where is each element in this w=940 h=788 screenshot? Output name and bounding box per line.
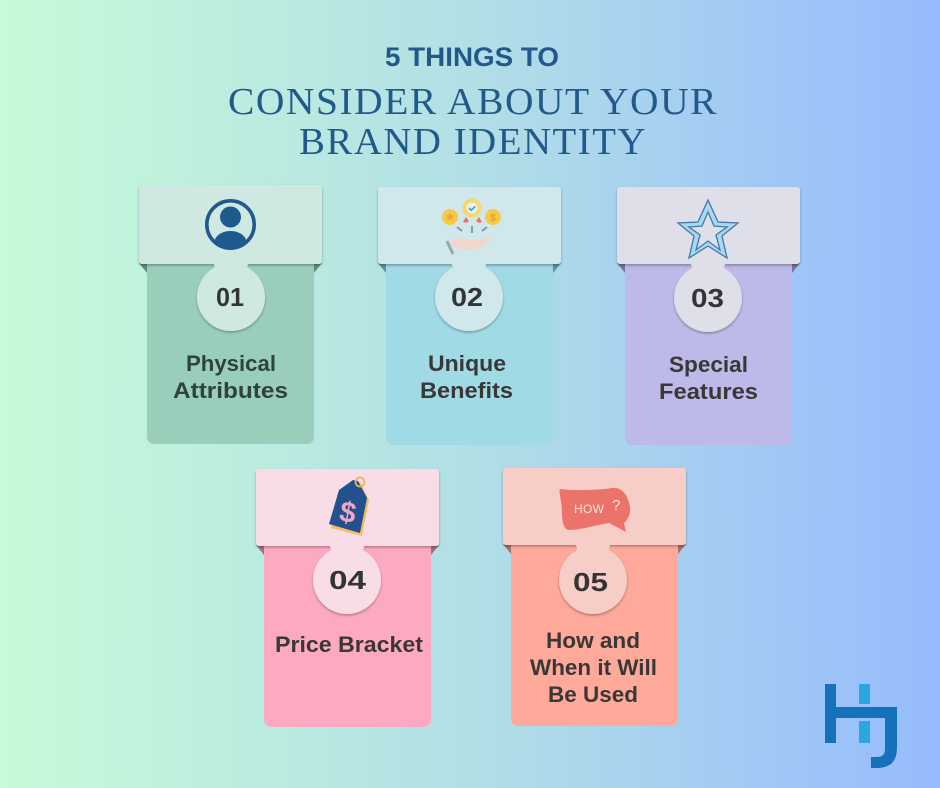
number 04: 04: [329, 565, 367, 595]
number 01: 01: [216, 282, 244, 312]
icon: hand with rewards: [442, 198, 501, 254]
panel: card 5 how and when: [503, 468, 686, 726]
icon: how speech bubble: HOW: [574, 502, 605, 516]
title: 5 THINGS TO: [385, 42, 559, 72]
label: [173, 351, 288, 403]
number 02: 02: [451, 282, 483, 312]
number 03: 03: [691, 283, 724, 313]
logo: [825, 684, 897, 768]
label: Unique: [428, 351, 506, 376]
icon: star: [678, 200, 738, 258]
label: [659, 352, 758, 404]
label: Price Bracket: [275, 632, 424, 657]
label: Special: [669, 352, 748, 377]
label: Be Used: [548, 682, 638, 707]
title: CONSIDER ABOUT YOUR: [228, 81, 718, 123]
icon: how speech bubble: [559, 488, 630, 532]
label: Benefits: [420, 378, 513, 403]
label: Attributes: [173, 378, 288, 403]
title: BRAND IDENTITY: [299, 121, 647, 163]
label: Features: [659, 379, 758, 404]
title: [228, 42, 718, 163]
icon: hand with rewards: $: [490, 213, 496, 224]
number 05: 05: [573, 567, 608, 597]
label: Physical: [186, 351, 276, 376]
panel: card 4 price bracket: [256, 469, 439, 727]
icon: price tag: $: [337, 496, 359, 530]
label: [420, 351, 513, 403]
label: When it Will: [530, 655, 657, 680]
icon: price tag: [329, 478, 369, 536]
label: [530, 628, 657, 707]
panel: card 1 physical attributes: [139, 185, 322, 444]
icon: how speech bubble: ?: [612, 497, 620, 514]
panel: card 2 unique benefits: [378, 187, 561, 445]
icon: person: [207, 201, 254, 248]
label: How and: [546, 628, 640, 653]
panel: card 3 special features: [617, 187, 800, 445]
